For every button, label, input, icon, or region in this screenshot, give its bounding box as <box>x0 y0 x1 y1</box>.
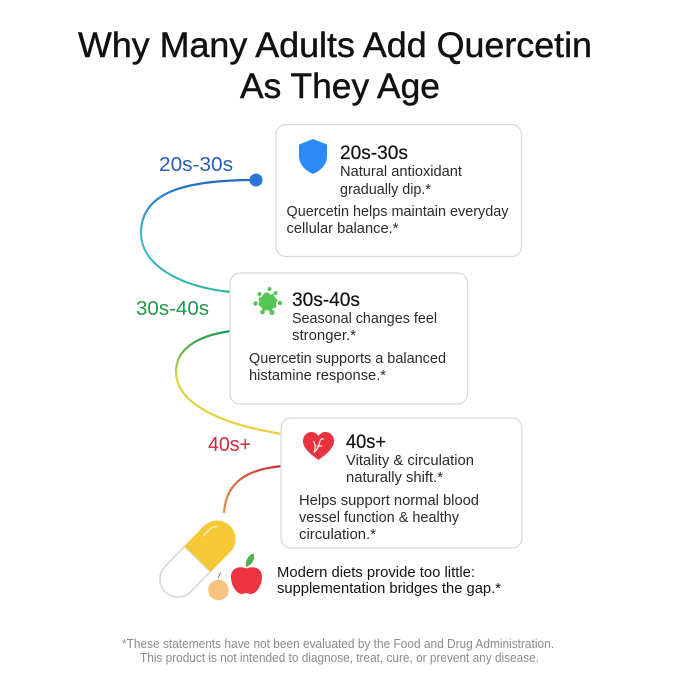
text: change: Vitality & circulation <box>346 452 474 469</box>
text: benefit: Quercetin supports a balanced <box>249 350 446 367</box>
timeline start dot <box>250 174 262 186</box>
footer disclaimer: This product is not intended to diagnose, treat, cure, or prevent any disease. <box>140 651 539 665</box>
icon: capsule <box>152 513 243 605</box>
heading: 40s+: 40s+ <box>346 432 386 453</box>
icon: peach <box>208 572 229 600</box>
panel: 40s+ <box>281 418 522 548</box>
footer disclaimer: *These statements have not been evaluated by the Food and Drug Administration. <box>122 637 554 651</box>
age label: 40s+: 40s+ <box>208 434 251 456</box>
timeline curve: 30s-40s <box>176 331 282 434</box>
callout: supplementation: supplementation bridges the gap.* <box>277 580 501 597</box>
footer disclaimer <box>122 637 554 665</box>
icon: heart <box>303 432 334 460</box>
callout: supplementation: Modern diets provide too little: <box>277 564 475 581</box>
text: change: gradually dip.* <box>340 181 431 198</box>
age label: 30s-40s: 30s-40s <box>136 298 209 320</box>
text: benefit: Helps support normal blood <box>299 492 479 509</box>
text: change <box>346 452 474 486</box>
icon: allergen particle <box>253 287 282 315</box>
text: change <box>340 163 463 198</box>
icon: shield <box>299 139 327 174</box>
text: change: naturally shift.* <box>346 469 443 486</box>
age label: 20s-30s: 20s-30s <box>159 154 233 176</box>
callout: supplementation <box>277 564 501 597</box>
title: As They Age <box>240 66 440 106</box>
text: benefit <box>249 350 446 384</box>
title <box>78 25 592 106</box>
text: benefit: Quercetin helps maintain everyday <box>286 203 509 220</box>
text: change: stronger.* <box>292 327 356 344</box>
text: benefit: histamine response.* <box>249 367 386 384</box>
text: change: Seasonal changes feel <box>292 310 437 327</box>
timeline curve: 20s-30s <box>141 180 256 292</box>
heading: 20s-30s: 20s-30s <box>340 143 408 164</box>
text: change: Natural antioxidant <box>340 163 463 180</box>
text: benefit <box>286 203 509 237</box>
icon: apple <box>231 554 262 594</box>
text: benefit: circulation.* <box>299 526 376 543</box>
timeline curve: 40s+ <box>224 466 282 513</box>
text: benefit: cellular balance.* <box>286 220 399 237</box>
panel: 20s-30s <box>276 124 522 256</box>
title: Why Many Adults Add Quercetin <box>78 25 592 65</box>
text: benefit: vessel function & healthy <box>299 509 459 526</box>
text: benefit <box>299 492 479 543</box>
panel: 30s-40s <box>230 273 468 404</box>
text: change <box>292 310 437 344</box>
heading: 30s-40s: 30s-40s <box>292 290 360 311</box>
